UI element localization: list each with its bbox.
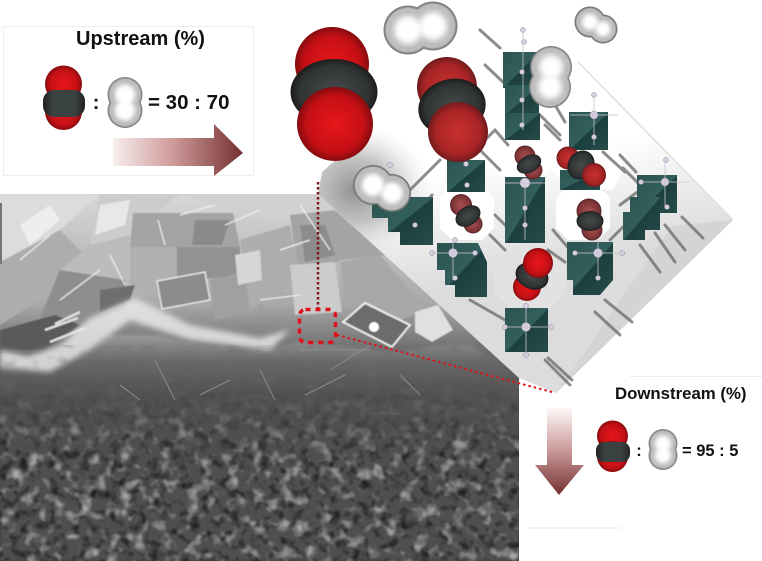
lattice pores: [440, 115, 625, 310]
text: colon upstream: :: [93, 91, 99, 114]
text: downstream ratio: = 95 : 5: [682, 442, 738, 460]
arrow: downstream flow: [535, 408, 584, 495]
scale mark: [0, 203, 2, 264]
ridge front: [0, 335, 519, 561]
icon: CO in pore bottom: [511, 248, 553, 301]
callout: dotted leader up: [317, 182, 319, 308]
lattice struts: [410, 30, 703, 385]
icon: large CO molecule: [290, 27, 378, 161]
heading: downstream: Downstream (%): [615, 384, 746, 403]
particle texture: [0, 400, 519, 561]
text: upstream ratio: = 30 : 70: [148, 91, 230, 114]
icon: CO in pore top: [514, 146, 544, 180]
panel: crystal lattice: [280, 28, 733, 393]
icon: CO molecule downstream: [596, 420, 630, 472]
icon: CO molecule upstream: [43, 66, 85, 130]
panel: SEM micrograph: [0, 194, 520, 561]
icon: H2 molecule in lattice: [529, 46, 572, 108]
icon: H2 molecule downstream: [648, 429, 678, 470]
icon: H2 molecule lower left: [353, 165, 411, 212]
icon: second CO molecule: [412, 57, 492, 162]
heading: upstream: Upstream (%): [76, 28, 205, 50]
lattice octahedra: [372, 52, 677, 352]
icon: CO in pore left: [450, 194, 484, 234]
icon: H2 molecule top right: [574, 6, 618, 44]
callout: selected region marker: [300, 310, 336, 342]
icon: CO in pore centre right: [576, 198, 604, 240]
arrow: upstream flow: [113, 124, 243, 176]
text: colon downstream: :: [636, 442, 642, 460]
lattice atoms: [388, 28, 670, 358]
icon: H2 molecule upstream: [108, 77, 142, 128]
crystals upper layer: [0, 194, 453, 350]
panel: upstream box: [4, 26, 254, 176]
icon: CO in pore right: [556, 145, 606, 187]
callout: dotted leader to lattice: [337, 335, 552, 392]
icon: H2 molecule top: [384, 2, 458, 54]
